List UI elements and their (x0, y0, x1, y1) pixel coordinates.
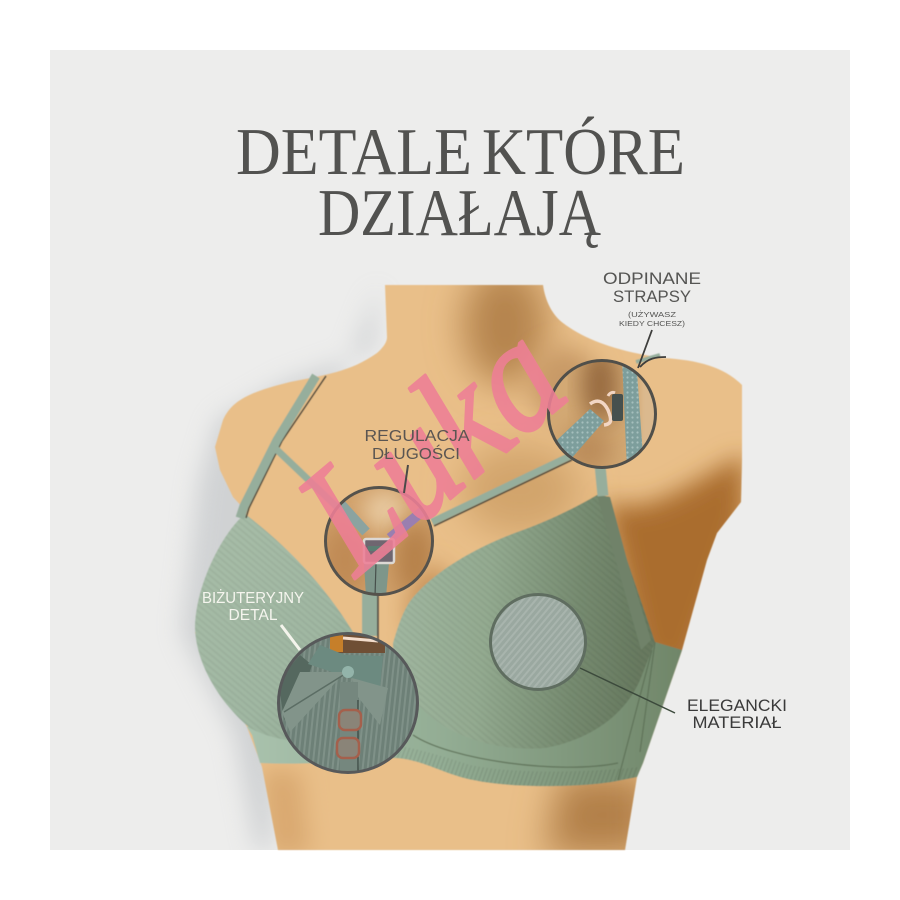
label: jewellery detail: BIŻUTERYJNY (202, 589, 304, 607)
infographic canvas (50, 50, 850, 851)
title (236, 115, 685, 250)
label: elegant material: ELEGANCKI (687, 697, 787, 715)
watermark: Luka (263, 285, 597, 606)
band seams (413, 642, 655, 780)
leader line: fabric (580, 668, 675, 713)
title: DZIAŁAJĄ (318, 176, 601, 250)
label: length adjustment: DŁUGOŚCI (372, 444, 460, 463)
detail circle: detachable strap (547, 359, 657, 469)
detail circle: fabric (490, 594, 586, 690)
mannequin torso with bra (195, 265, 745, 855)
label: length adjustment: REGULACJA (364, 428, 470, 445)
mannequin shadow (181, 285, 379, 850)
label: detachable straps: ODPINANE (603, 270, 701, 288)
label: detachable straps: (UŻYWASZ (628, 310, 677, 319)
label: detachable straps: KIEDY CHCESZ) (619, 319, 686, 328)
background panel (50, 50, 850, 850)
underband (247, 640, 682, 786)
cup edge trim (597, 495, 651, 650)
label: length adjustment (364, 428, 470, 463)
leader line: detachable strap (638, 330, 666, 368)
label: elegant material (687, 697, 787, 732)
skin shading (262, 265, 745, 855)
title: KTÓRE (482, 115, 685, 189)
detail circle: length adjuster (320, 487, 435, 600)
leader line: length adjuster (404, 465, 408, 493)
detail circle: jewellery detail (278, 630, 418, 773)
label: jewellery detail: DETAL (228, 607, 278, 624)
right cup (393, 495, 655, 749)
torso (195, 285, 742, 850)
label: detachable straps: STRAPSY (613, 288, 691, 306)
label: jewellery detail (202, 589, 304, 624)
leader line: jewellery detail (281, 625, 300, 650)
label: detachable straps (603, 270, 701, 328)
strap shadows (246, 376, 572, 526)
left cup (195, 514, 372, 743)
title: DETALE (236, 115, 472, 189)
straps (240, 355, 660, 636)
label: elegant material: MATERIAŁ (692, 714, 782, 732)
